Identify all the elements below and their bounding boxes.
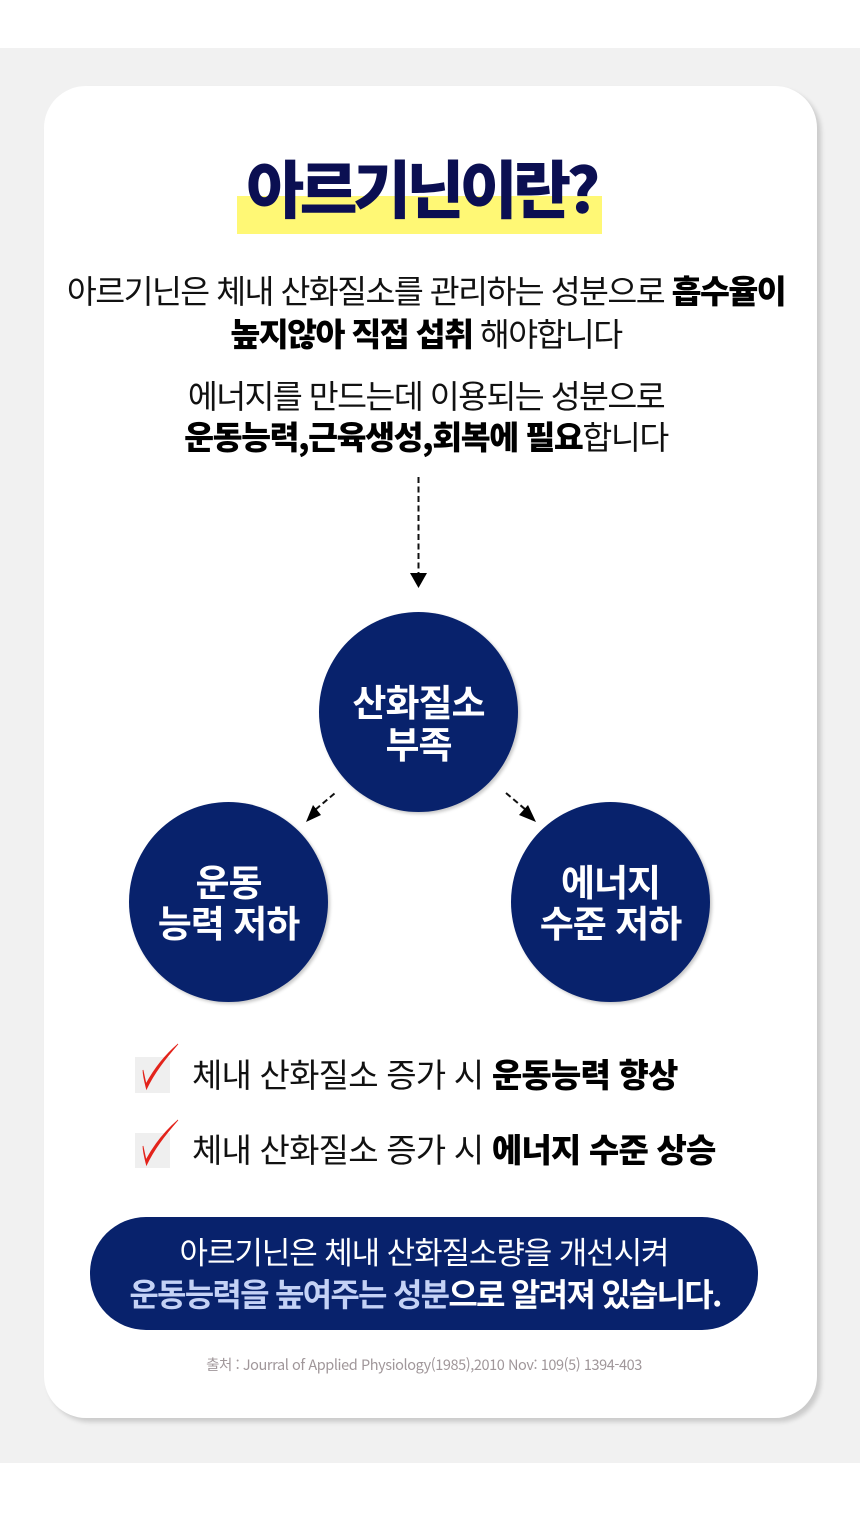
circle: oxide shortage (319, 612, 518, 812)
circle text line 1: 에너지 (561, 853, 660, 907)
check text 2: 체내 산화질소 증가 시 에너지 수준 상승 (192, 1124, 716, 1172)
panel: main card (44, 86, 817, 1418)
circle text line 2: 부족 (385, 715, 452, 769)
panel: conclusion pill (90, 1217, 758, 1330)
circle text line 1: 운동 (195, 853, 262, 907)
icon: check 1 (135, 1044, 178, 1093)
check text 1: 체내 산화질소 증가 시 운동능력 향상 (192, 1049, 678, 1097)
arrow: down (410, 477, 427, 588)
circle: exercise ability (129, 802, 328, 1002)
text block: intro line 2: 높지않아 직접 섭취 해야합니다 (230, 309, 622, 356)
conclusion line 2: 운동능력을 높여주는 성분으로 알려져 있습니다. (129, 1270, 721, 1316)
arrow: left diagonal (306, 792, 336, 822)
conclusion line 1: 아르기닌은 체내 산화질소량을 개선시켜 (180, 1228, 668, 1273)
text block: energy line 1: 에너지를 만드는데 이용되는 성분으로 (188, 371, 664, 418)
text block: energy line 2: 운동능력,근육생성,회복에 필요합니다 (184, 412, 668, 459)
circle: energy level (511, 802, 710, 1002)
text block: intro line 1: 아르기닌은 체내 산화질소를 관리하는 성분으로 흡수율이 (67, 266, 785, 313)
circle text line 1: 산화질소 (352, 673, 485, 727)
title: 아르기닌이란? (246, 141, 596, 232)
title highlight (237, 196, 602, 234)
source note: 출처 : Jourral of Applied Physiology(1985),2010 Nov: 109(5) 1394-403 (206, 1354, 642, 1375)
circle text line 2: 능력 저하 (158, 894, 299, 948)
arrow: right diagonal (505, 792, 536, 822)
circle text line 2: 수준 저하 (540, 894, 681, 948)
icon: check 2 (135, 1120, 178, 1168)
